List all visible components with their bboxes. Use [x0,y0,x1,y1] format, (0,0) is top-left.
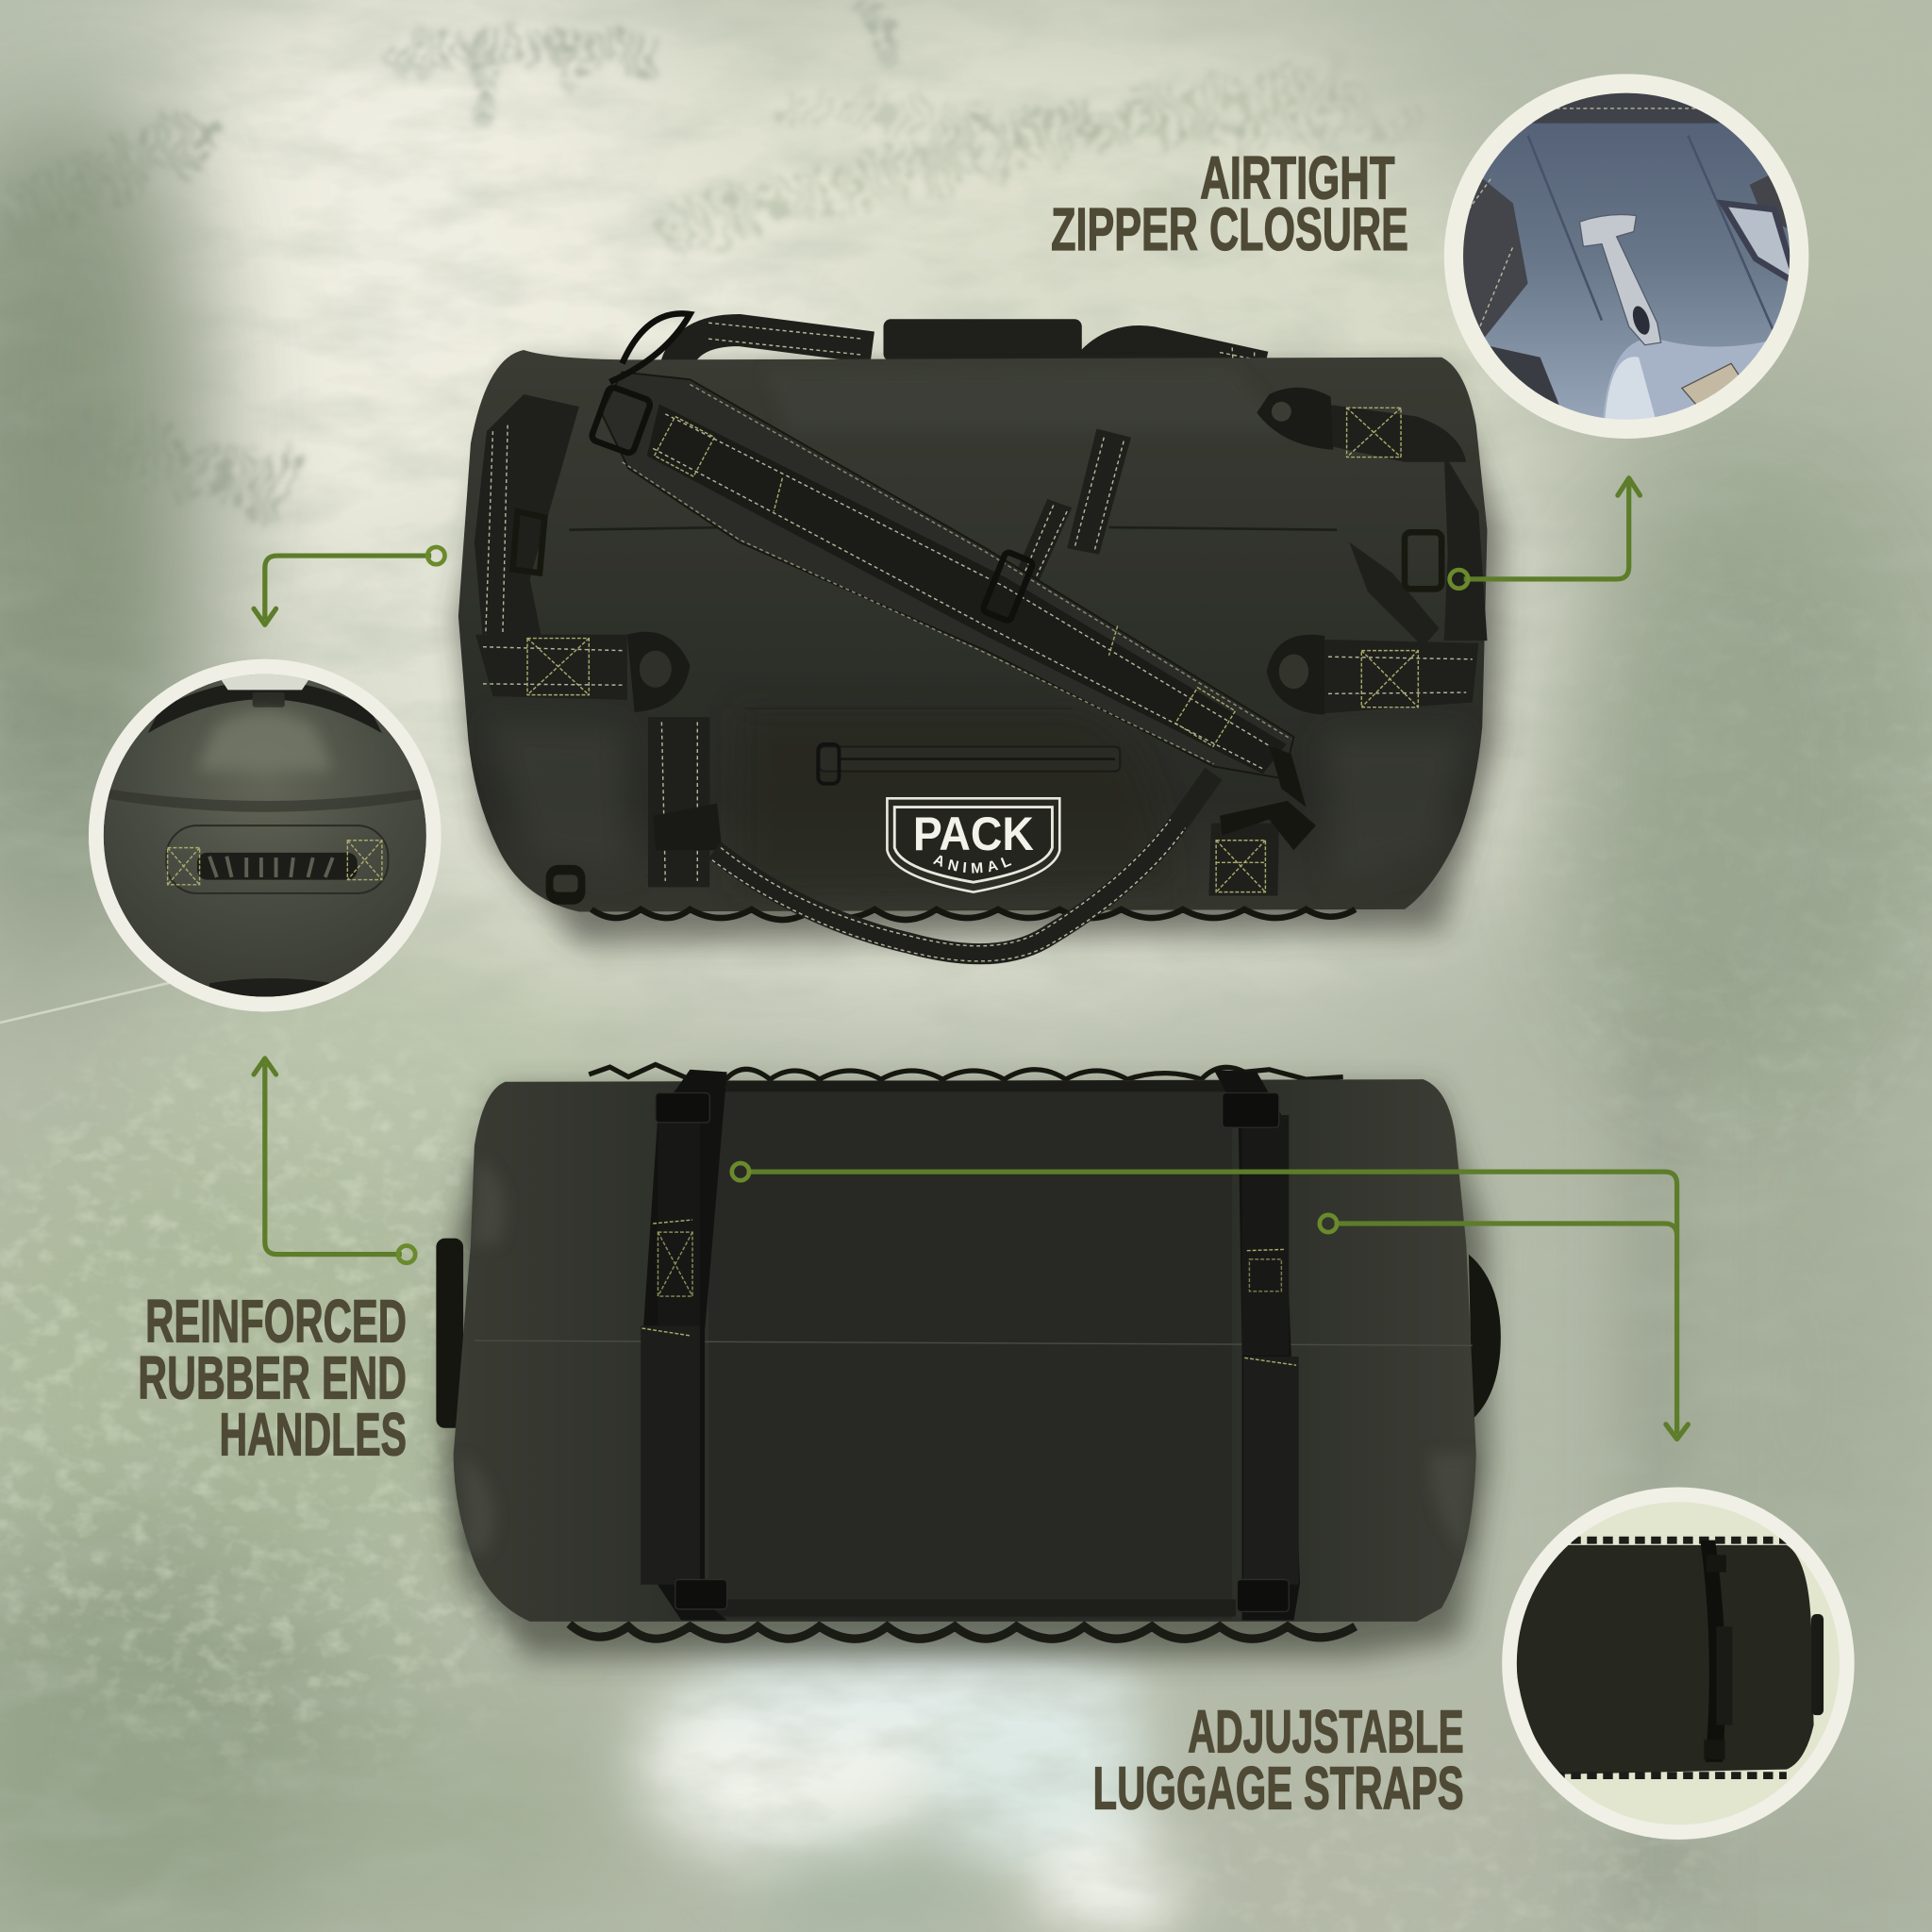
logo wordmark PACK: PACK [913,808,1034,860]
zipper pull [1579,215,1661,345]
lower carry strap [712,774,1214,961]
bottom duffel bag [436,1064,1501,1657]
strap buckles [591,313,1034,622]
arrow: end handle bottom pointer [254,1058,415,1263]
side fold highlights [462,1158,1474,1553]
lower right webbing and clip [1208,745,1316,896]
right luggage strap [1214,1070,1300,1621]
bottom bag drop shadow [443,1091,1489,1657]
heading: reinforced rubber end handles: RUBBER END [138,1343,407,1411]
bag body [454,1079,1476,1622]
arrow: luggage strap pointer [732,1163,1688,1440]
photo circle: end handle detail [89,659,441,1011]
bag drop shadow [458,370,1501,942]
centre seam [475,1341,1473,1345]
left luggage strap [641,1070,727,1621]
front pocket zipper [818,744,1120,784]
heading: airtight zipper closure: ZIPPER CLOSURE [1051,195,1408,263]
lower lash loops [569,1624,1356,1639]
callout: reinforced rubber end handles [89,547,445,1469]
small tie-down straps [1008,429,1131,604]
left end handle [436,1239,463,1428]
arrow: end handle top pointer [254,547,445,625]
heading: reinforced rubber end handles: REINFORCED [145,1287,407,1355]
centre panel [708,1080,1236,1619]
heading: adjustable luggage straps: LUGGAGE STRAPS [1093,1754,1464,1822]
arrow: zipper pointer [1450,478,1640,589]
right end handle [1469,1255,1501,1420]
heading: adjustable luggage straps: ADJUJSTABLE [1188,1697,1464,1765]
bottom lash loops [591,909,1356,920]
callout: airtight zipper closure [1051,74,1808,589]
top carry handle [883,319,1082,361]
heading: reinforced rubber end handles [138,1287,407,1469]
bag body [458,350,1487,912]
logo wordmark ANIMAL: ANIMAL [932,855,1011,874]
Pack Animal shield logo [886,797,1061,893]
heading: airtight zipper closure [1051,143,1408,263]
padded shoulder strap [601,372,1293,778]
webbing tabs with stitched patches [475,402,1478,713]
right side webbing and ring [1349,454,1487,647]
front vertical webbing handle [648,717,722,887]
body shading folds [487,367,1466,893]
top duffel bag [439,310,1519,964]
left side webbing [475,394,579,641]
photo circle: zipper detail [1444,74,1808,439]
photo circle: strap detail [1502,1487,1855,1840]
callout: adjustable luggage straps [732,1163,1855,1840]
carry straps on top edge [675,323,1264,390]
heading: reinforced rubber end handles: HANDLES [219,1401,407,1469]
heading: airtight zipper closure: AIRTIGHT [1200,143,1395,211]
heading: adjustable luggage straps [1093,1697,1464,1822]
plastic D-ring anchors [627,388,1333,715]
top lash loops [589,1064,1343,1079]
rubber valve [546,865,585,905]
